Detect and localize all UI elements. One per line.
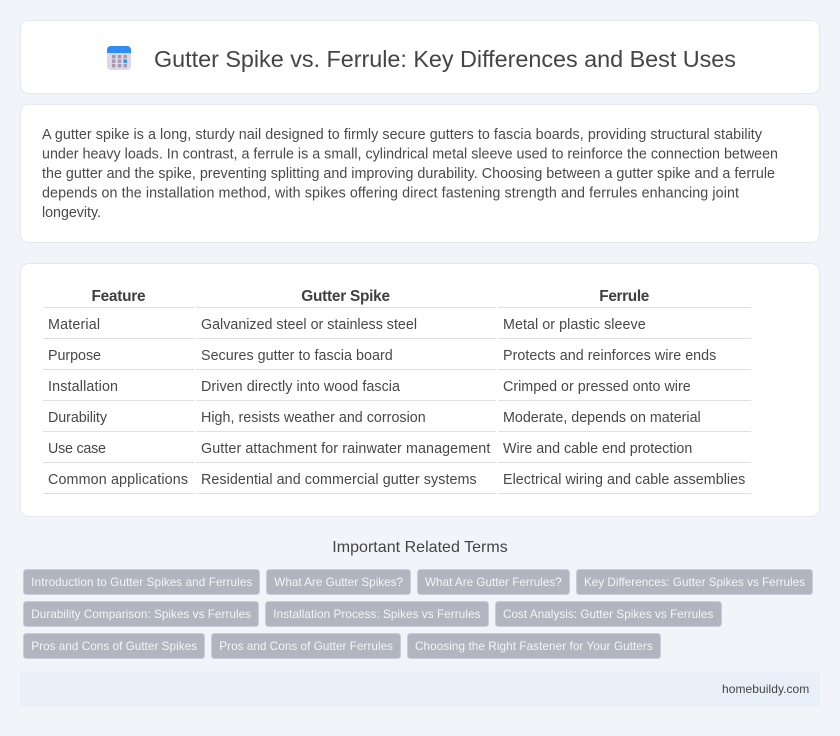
related terms heading: Important Related Terms: [332, 539, 508, 556]
row: use case: Use case: [48, 441, 106, 457]
tag: introduction: Introduction to Gutter Spikes and Ferrules: [31, 576, 252, 589]
row: installation: [43, 379, 751, 401]
intro paragraph: the gutter and the spike, preventing splitting and improving durability. Choosing between a gutter spike and a ferrule: [42, 166, 775, 182]
row: common applications: [43, 472, 751, 494]
panel: comparison table: [20, 264, 820, 516]
row: purpose: [43, 348, 751, 370]
table header row: [43, 288, 751, 308]
row: use case: Wire and cable end protection: [503, 441, 692, 457]
tag: key differences: Key Differences: Gutter Spikes vs Ferrules: [584, 576, 805, 589]
table header row: Ferrule: [599, 288, 650, 305]
table header row: Feature: [92, 288, 146, 305]
row: common applications: Common applications: [48, 472, 188, 488]
tag: key differences: [576, 570, 812, 594]
row: installation: Installation: [48, 379, 118, 395]
panel: introduction: [20, 104, 820, 242]
row: installation: Driven directly into wood fascia: [201, 379, 400, 395]
tag: what are ferrules: What Are Gutter Ferrules?: [425, 576, 562, 589]
tag: installation: Installation Process: Spikes vs Ferrules: [273, 608, 481, 621]
row: common applications: Electrical wiring and cable assemblies: [503, 472, 745, 488]
footer: [20, 672, 820, 706]
row: purpose: Protects and reinforces wire ends: [503, 348, 716, 364]
icon: calendar: [107, 46, 131, 70]
intro paragraph: longevity.: [42, 205, 101, 221]
row: purpose: Purpose: [48, 348, 101, 364]
row: common applications: Residential and commercial gutter systems: [201, 472, 477, 488]
tag: pros cons ferrules: [212, 634, 400, 658]
tag: pros cons spikes: Pros and Cons of Gutter Spikes: [31, 640, 197, 653]
row: material: Metal or plastic sleeve: [503, 317, 646, 333]
intro paragraph: A gutter spike is a long, sturdy nail designed to firmly secure gutters to fascia boards, providing structural stability: [42, 127, 763, 143]
row: durability: [43, 410, 751, 432]
row: durability: Moderate, depends on material: [503, 410, 701, 426]
table header row: Gutter Spike: [301, 288, 390, 305]
tag: what are ferrules: [418, 570, 570, 594]
tag: choosing fastener: Choosing the Right Fastener for Your Gutters: [415, 640, 653, 653]
tag: introduction: [24, 570, 260, 594]
row: durability: High, resists weather and corrosion: [201, 410, 426, 426]
intro paragraph: under heavy loads. In contrast, a ferrule is a small, cylindrical metal sleeve used to reinforce the connection between: [42, 147, 778, 163]
tag: durability: [24, 602, 258, 626]
row: use case: Gutter attachment for rainwater management: [201, 441, 490, 457]
tag: durability: Durability Comparison: Spikes vs Ferrules: [31, 608, 251, 621]
row: purpose: Secures gutter to fascia board: [201, 348, 393, 364]
tag: cost: [496, 602, 722, 626]
row: material: Material: [48, 317, 100, 333]
header panel: [20, 20, 820, 94]
row: installation: Crimped or pressed onto wire: [503, 379, 691, 395]
tag: cost: Cost Analysis: Gutter Spikes vs Ferrules: [503, 608, 713, 621]
row: durability: Durability: [48, 410, 108, 426]
row: material: [43, 317, 751, 339]
tag: pros cons spikes: [24, 634, 204, 658]
tag: what are spikes: What Are Gutter Spikes?: [274, 576, 403, 589]
title: Gutter Spike vs. Ferrule: Key Differences and Best Uses: [154, 46, 736, 72]
tag: choosing fastener: [408, 634, 660, 658]
tag: installation: [266, 602, 488, 626]
related terms tags: [24, 570, 812, 658]
tag: pros cons ferrules: Pros and Cons of Gutter Ferrules: [219, 640, 393, 653]
footer: homebuildy.com: [722, 682, 809, 696]
intro paragraph: depends on the installation method, with spikes offering direct fastening strength and ferrules enhancing joint: [42, 186, 739, 202]
tag: what are spikes: [266, 570, 410, 594]
row: material: Galvanized steel or stainless steel: [201, 317, 417, 333]
row: use case: [43, 441, 751, 463]
intro paragraph: [42, 127, 778, 221]
